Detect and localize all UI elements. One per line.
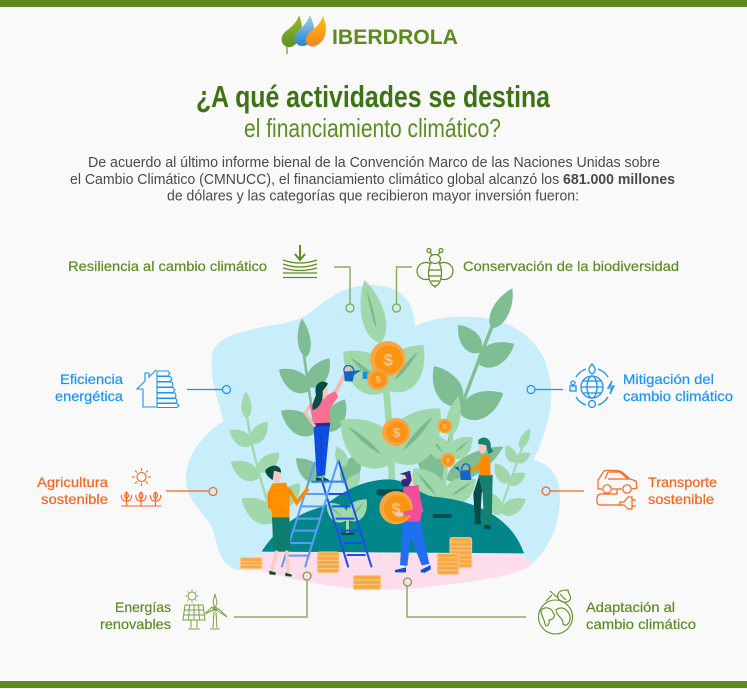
connector: conservación (392, 267, 412, 312)
icon: electric car (597, 470, 637, 509)
icon: resiliencia (283, 245, 317, 278)
label: adaptación: cambio climático (586, 616, 696, 632)
second plant (273, 318, 368, 489)
connector: resiliencia (334, 267, 354, 312)
man with coin: $ (392, 501, 401, 518)
logo: Iberdrola: IBERDROLA (332, 26, 458, 49)
coins on plants (367, 341, 455, 467)
coin stacks (240, 538, 472, 589)
label: energías: renovables (100, 616, 171, 632)
connector: adaptación (404, 578, 526, 617)
coins on plants: $ (446, 457, 450, 464)
icon: solar panel and turbine (183, 590, 227, 629)
far left plant (225, 392, 306, 531)
title: ¿A qué actividades se destina (196, 79, 551, 114)
label: eficiencia (55, 371, 123, 404)
right lower plant (403, 395, 483, 515)
label: agricultura (37, 474, 108, 507)
top bar (0, 0, 747, 7)
pink ground (243, 551, 532, 590)
icon: bee (417, 248, 453, 288)
label: transporte (648, 474, 717, 507)
far right plant (482, 426, 534, 520)
label: mitigación: Mitigación del (623, 371, 714, 387)
label: transporte: Transporte (648, 474, 717, 490)
woman left (265, 466, 308, 577)
coins on plants: $ (443, 423, 447, 430)
intro paragraph: De acuerdo al último informe bienal de la Convención Marco de las Naciones Unidas sobre (88, 155, 660, 171)
woman on ladder (305, 367, 348, 482)
coins on plants: $ (375, 375, 381, 385)
ladder back (322, 460, 372, 567)
bottom bar (0, 681, 747, 688)
man with coin (379, 471, 431, 573)
label: conservación: Conservación de la biodiversidad (463, 258, 679, 274)
label: energías: Energías (115, 599, 171, 615)
label: mitigación: cambio climático (623, 388, 733, 404)
label: agricultura: sostenible (41, 491, 108, 507)
background blob (186, 285, 560, 570)
connector: mitigación (527, 386, 563, 394)
label: eficiencia: Eficiencia (60, 371, 123, 387)
central illustration (186, 277, 560, 590)
icon: earth with leaf (538, 590, 572, 634)
woman right with can (454, 438, 493, 529)
label: transporte: sostenible (648, 491, 714, 507)
connector: transporte (542, 487, 584, 495)
label: adaptación (586, 599, 696, 632)
small plant under ladder (321, 493, 373, 533)
teal hill (262, 479, 524, 553)
coins on plants: $ (384, 350, 394, 369)
watering can top (344, 365, 367, 382)
label: resiliencia: Resiliencia al cambio climático (68, 258, 267, 274)
intro paragraph (70, 155, 675, 204)
right tall plant (408, 284, 520, 490)
intro paragraph: de dólares y las categorías que recibieron mayor inversión fueron: (167, 188, 579, 204)
connector: energías (234, 572, 311, 617)
plant bases (341, 489, 452, 535)
intro paragraph: el Cambio Climático (CMNUCC), el financiamiento climático global alcanzó los 681.000 millones (70, 172, 675, 188)
connector: eficiencia (187, 386, 230, 394)
icon: globe cycle (570, 364, 614, 408)
connector: agricultura (166, 488, 217, 496)
logo: Iberdrola (282, 15, 458, 54)
icon: house with energy bars (137, 370, 179, 408)
label: adaptación: Adaptación al (586, 599, 675, 615)
label: eficiencia: energética (55, 388, 123, 404)
subtitle: el financiamiento climático? (244, 113, 501, 143)
ladder front (282, 460, 345, 567)
coins on plants: $ (393, 425, 401, 440)
icon: sun and crops (121, 468, 161, 506)
center plant (327, 277, 457, 488)
label: energías (100, 599, 171, 632)
label: mitigación (623, 371, 733, 404)
label: agricultura: Agricultura (37, 474, 108, 490)
